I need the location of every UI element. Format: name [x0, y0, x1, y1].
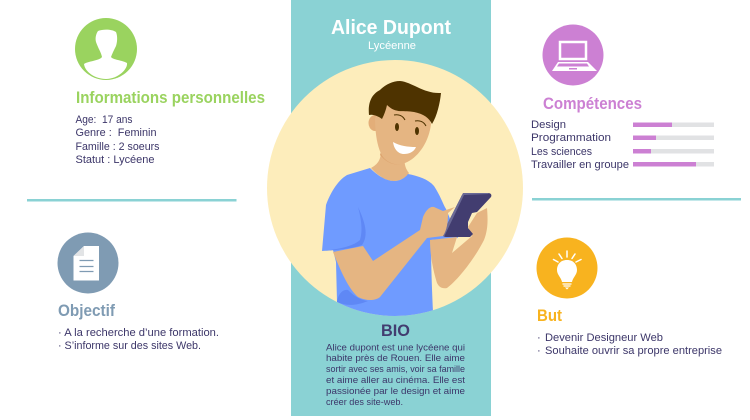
icon: user — [75, 18, 137, 80]
heading: BIO: BIO — [381, 321, 410, 340]
text: biography — [326, 342, 465, 407]
details: Famille : 2 soeurs — [76, 141, 160, 153]
hair — [369, 81, 441, 124]
neck shadow — [380, 152, 396, 164]
skill labels: Travailler en groupe — [531, 159, 629, 171]
skill labels — [531, 119, 629, 171]
smile — [393, 142, 416, 154]
list: · — [537, 345, 541, 357]
panel: but — [536, 238, 722, 357]
details — [76, 114, 160, 166]
heading: But — [537, 307, 562, 325]
divider right — [532, 198, 741, 200]
details: Genre : Feminin — [76, 127, 156, 139]
icon: light bulb — [536, 238, 598, 298]
text: biography: sortir avec ses amis, voir sa famille — [326, 364, 465, 374]
skill labels: Programmation — [531, 132, 611, 144]
eyes — [395, 123, 419, 135]
skill labels: Design — [531, 119, 566, 131]
text: biography: habite près de Rouen. Elle aime — [326, 353, 465, 363]
title: name: Alice Dupont — [331, 17, 451, 39]
shirt — [322, 168, 458, 316]
text: biography: passionée par le design et aime — [326, 386, 465, 396]
list: Devenir Designeur Web — [545, 332, 663, 344]
text: biography: et aime aller au cinéma. Elle est — [326, 375, 465, 385]
icon: document — [58, 232, 118, 294]
panel: central teal column — [291, 0, 491, 416]
eyebrows — [394, 115, 426, 126]
list: · S’informe sur des sites Web. — [58, 340, 201, 352]
panel: competences — [531, 24, 714, 171]
skill labels: Les sciences — [531, 146, 592, 158]
heading: Objectif — [58, 302, 115, 320]
heading: Compétences — [543, 95, 642, 113]
list — [58, 327, 219, 352]
divider left — [27, 199, 236, 202]
tablet edge — [442, 193, 489, 237]
shirt shadow — [323, 207, 366, 251]
neck — [371, 156, 409, 181]
list: · — [537, 332, 541, 344]
illustration: person with tablet — [322, 81, 491, 316]
head — [375, 100, 431, 164]
tablet — [443, 193, 491, 237]
left arm — [333, 207, 455, 300]
torso shadow — [337, 290, 368, 305]
details: Statut : Lycéene — [76, 154, 154, 166]
panel: informations personnelles — [75, 18, 265, 166]
portrait circle — [267, 60, 523, 316]
text: biography: Alice dupont est une lycéene qui — [326, 342, 465, 352]
heading: Informations personnelles — [76, 89, 265, 107]
details: Age: 17 ans — [76, 114, 133, 126]
panel: objectif — [58, 232, 219, 352]
skill bars — [633, 122, 714, 166]
list: · A la recherche d’une formation. — [58, 327, 219, 339]
list — [537, 332, 722, 357]
ear — [368, 115, 376, 131]
icon: laptop — [542, 24, 604, 86]
subtitle: role: Lycéenne — [368, 40, 416, 52]
right arm — [430, 208, 488, 288]
text: biography: créer des site-web. — [326, 397, 403, 407]
list: Souhaite ouvrir sa propre entreprise — [545, 345, 722, 357]
